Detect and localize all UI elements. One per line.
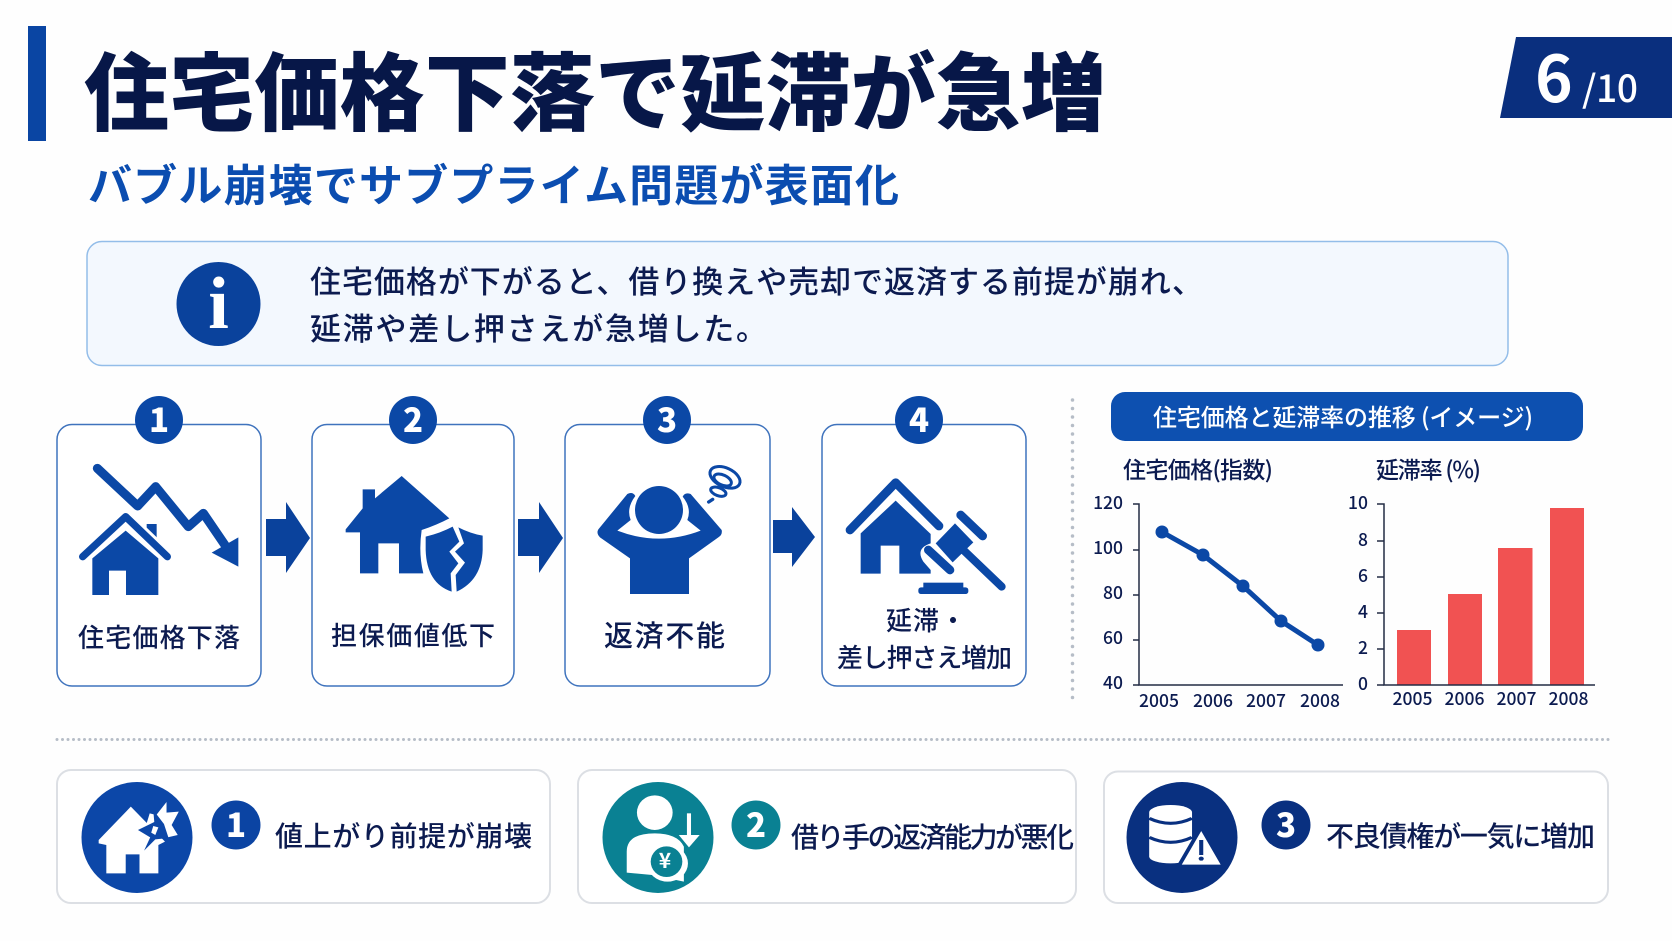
line chart: housing price index: 2005 xyxy=(1139,688,1179,713)
page number badge xyxy=(1500,29,1672,121)
bar chart: delinquency rate: 2007 xyxy=(1497,686,1536,711)
icon: borrower repayment decline xyxy=(602,782,714,893)
takeaway 3 text: 不良債権が一気に増加 xyxy=(1326,815,1595,855)
number 2: 2 xyxy=(746,799,766,847)
icon: information xyxy=(176,262,260,346)
panel: takeaway 1 xyxy=(57,770,550,903)
page number badge: 6 xyxy=(1535,29,1573,121)
line chart: housing price index: 2007 xyxy=(1246,688,1286,713)
step 1 number: 1 xyxy=(149,394,169,442)
panel: key message xyxy=(87,242,1508,366)
key message text: 住宅価格が下がると、借り換えや売却で返済する前提が崩れ、 xyxy=(310,257,1203,302)
bar chart: delinquency rate: 10 xyxy=(1348,490,1368,515)
chart panel xyxy=(1093,392,1595,713)
subtitle: バブル崩壊でサブプライム問題が表面化 xyxy=(88,150,899,214)
icon: house and cracked shield xyxy=(346,476,483,592)
step 1 number xyxy=(135,394,183,444)
step 2 number: 2 xyxy=(403,394,423,442)
chart heading xyxy=(1111,392,1583,441)
number 1 xyxy=(212,799,260,850)
step 3 number: 3 xyxy=(657,394,677,442)
panel: takeaway 2 xyxy=(578,770,1076,903)
page number badge: /10 xyxy=(1582,59,1638,113)
step 4 label xyxy=(837,601,1012,675)
step 2 number xyxy=(389,394,437,444)
bar chart: delinquency rate xyxy=(1348,451,1595,711)
panel: step 1 xyxy=(57,394,261,686)
line chart: housing price index: 120 xyxy=(1093,490,1123,515)
line chart: housing price index: 100 xyxy=(1093,535,1123,560)
number 3: 3 xyxy=(1276,799,1296,847)
step 3 label: 返済不能 xyxy=(604,613,725,655)
icon: information: i xyxy=(208,263,229,345)
panel: step 2 xyxy=(312,394,514,686)
panel: step 3 xyxy=(565,394,770,686)
bar chart: delinquency rate: 2008 xyxy=(1549,686,1588,711)
bar chart: delinquency rate: 2 xyxy=(1358,635,1368,660)
line chart: housing price index: 40 xyxy=(1103,670,1123,695)
horizontal dotted divider xyxy=(57,738,1611,741)
arrow: step 3 to 4 xyxy=(773,507,815,567)
step 4 label: 差し押さえ増加 xyxy=(837,638,1012,675)
key message text: 延滞や差し押さえが急増した。 xyxy=(310,304,767,349)
title accent bar xyxy=(28,26,46,141)
line chart: housing price index: 60 xyxy=(1103,625,1123,650)
panel: takeaway 3 xyxy=(1104,772,1608,903)
bar chart: delinquency rate: 2005 xyxy=(1393,686,1432,711)
step 4 number xyxy=(895,394,943,444)
bar chart: delinquency rate: 延滞率 (%) xyxy=(1376,451,1481,485)
line chart: housing price index: 80 xyxy=(1103,580,1123,605)
takeaway 2 text: 借り手の返済能力が悪化 xyxy=(791,816,1074,856)
number 1: 1 xyxy=(226,799,246,847)
number 3 xyxy=(1262,799,1310,850)
bar chart: delinquency rate: 4 xyxy=(1358,599,1368,624)
step 3 number xyxy=(643,394,691,444)
line chart: housing price index: 住宅価格(指数) xyxy=(1123,451,1273,485)
bar chart: delinquency rate: 6 xyxy=(1358,563,1368,588)
line chart: housing price index xyxy=(1093,451,1343,713)
bar chart: delinquency rate: 0 xyxy=(1358,671,1368,696)
icon: house with falling price xyxy=(83,468,238,595)
step 4 label: 延滞・ xyxy=(886,601,966,638)
icon: foreclosure house and gavel xyxy=(850,483,1002,594)
takeaway 1 text: 値上がり前提が崩壊 xyxy=(275,815,532,855)
step 1 label: 住宅価格下落 xyxy=(78,618,240,655)
title: 住宅価格下落で延滞が急増 xyxy=(84,26,1106,149)
panel: step 4 xyxy=(822,394,1026,686)
step 4 number: 4 xyxy=(909,394,929,442)
number 2 xyxy=(732,799,780,850)
arrow: step 2 to 3 xyxy=(518,502,563,573)
icon: borrower repayment decline: ¥ xyxy=(659,845,672,875)
step 2 label: 担保価値低下 xyxy=(331,616,495,653)
key message text xyxy=(310,257,1203,349)
line chart: housing price index: 2006 xyxy=(1193,688,1233,713)
chart heading: 住宅価格と延滞率の推移 (イメージ) xyxy=(1153,398,1533,433)
line chart: housing price index: 2008 xyxy=(1300,688,1340,713)
arrow: step 1 to 2 xyxy=(266,502,310,573)
icon: house with collapse burst xyxy=(82,782,192,893)
icon: worried person xyxy=(597,462,743,594)
bar chart: delinquency rate: 8 xyxy=(1358,527,1368,552)
icon: database with warning xyxy=(1126,782,1238,893)
bar chart: delinquency rate: 2006 xyxy=(1445,686,1484,711)
vertical dotted divider xyxy=(1071,400,1074,704)
